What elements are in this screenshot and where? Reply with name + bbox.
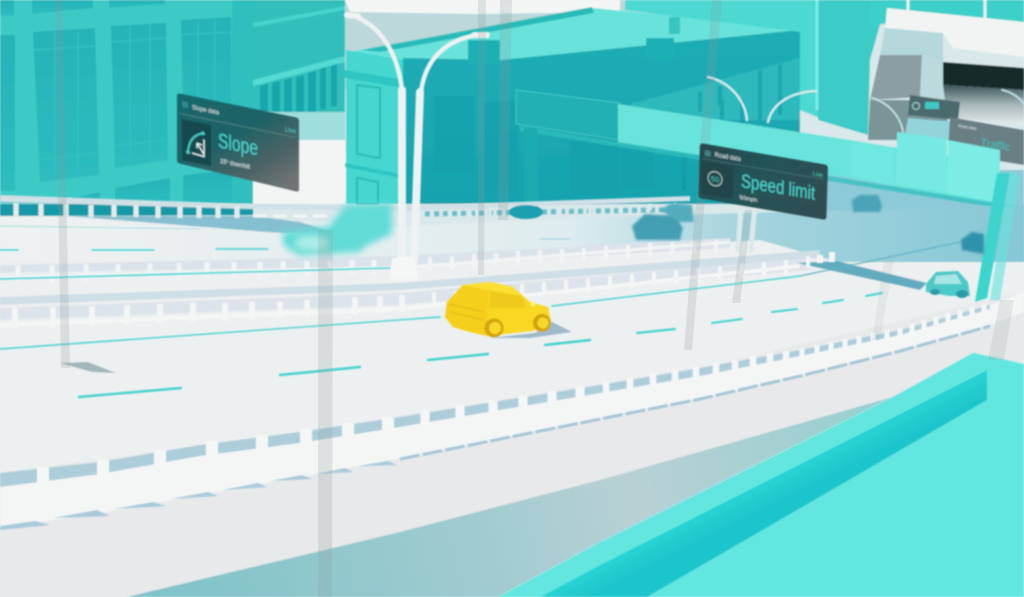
grey-teal gap under the deck [127,397,893,597]
panel: road data [698,143,828,220]
street light pair, far [708,77,816,250]
lane markings [0,233,960,397]
barrier posts [43,304,984,488]
speed limit title: Speed limit [741,171,816,205]
panel header: Live [813,171,823,179]
slope title: Slope [218,130,258,161]
blue rail band [0,305,990,487]
gantry post foot [509,205,543,219]
speed limit value: 50mph [739,195,757,204]
barrier: near edge [0,292,1024,530]
building: right white overpass [868,0,1024,165]
street lights [347,15,1024,280]
barrier: lower median rail [0,252,832,328]
panel: slope data [177,93,299,192]
icon: speed limit dial: 50 [711,174,719,184]
barrier: upper median rail [0,240,730,282]
car body [445,282,551,336]
car: white-teal near gantry [926,271,970,298]
building: upper right tower [625,0,887,135]
building: upper left teal [0,0,348,204]
barrier: far rail [0,195,690,219]
street light pair, near [347,15,487,262]
distant sign text: Traffic [980,137,1011,154]
car: yellow SUV [445,282,572,338]
saw-tooth shadow [0,326,990,530]
car: far teal right [961,232,984,254]
building: right white overpass: Road data [958,123,978,131]
building: central teal block [345,7,830,204]
gantry: sign boards [516,90,1015,211]
panel header [180,101,297,138]
car: far teal left [632,203,694,240]
far carriageway [0,195,1024,300]
icon: slope gauge [182,119,211,166]
wall below the road [0,292,1024,597]
panel header: Road data [715,153,741,163]
shadows on road [797,261,927,290]
panel header: Live [285,127,297,135]
main road surface [0,238,1024,597]
rooftop boxes [468,17,680,64]
blue shaded far road [790,170,1024,262]
car shadow [490,322,572,338]
building: rear grey block [340,0,640,90]
white rail body [0,292,1024,528]
car: motion-blurred teal [282,203,392,256]
car: far teal middle [852,195,882,212]
slope value: 15º downhill [220,158,250,171]
gantry: support post [975,172,1020,302]
median strip [0,250,820,305]
distant cars [282,195,984,298]
panel header: Slope data [192,105,220,117]
city background [0,0,1024,262]
foreground teal band [498,353,1024,597]
panel header [703,150,825,180]
